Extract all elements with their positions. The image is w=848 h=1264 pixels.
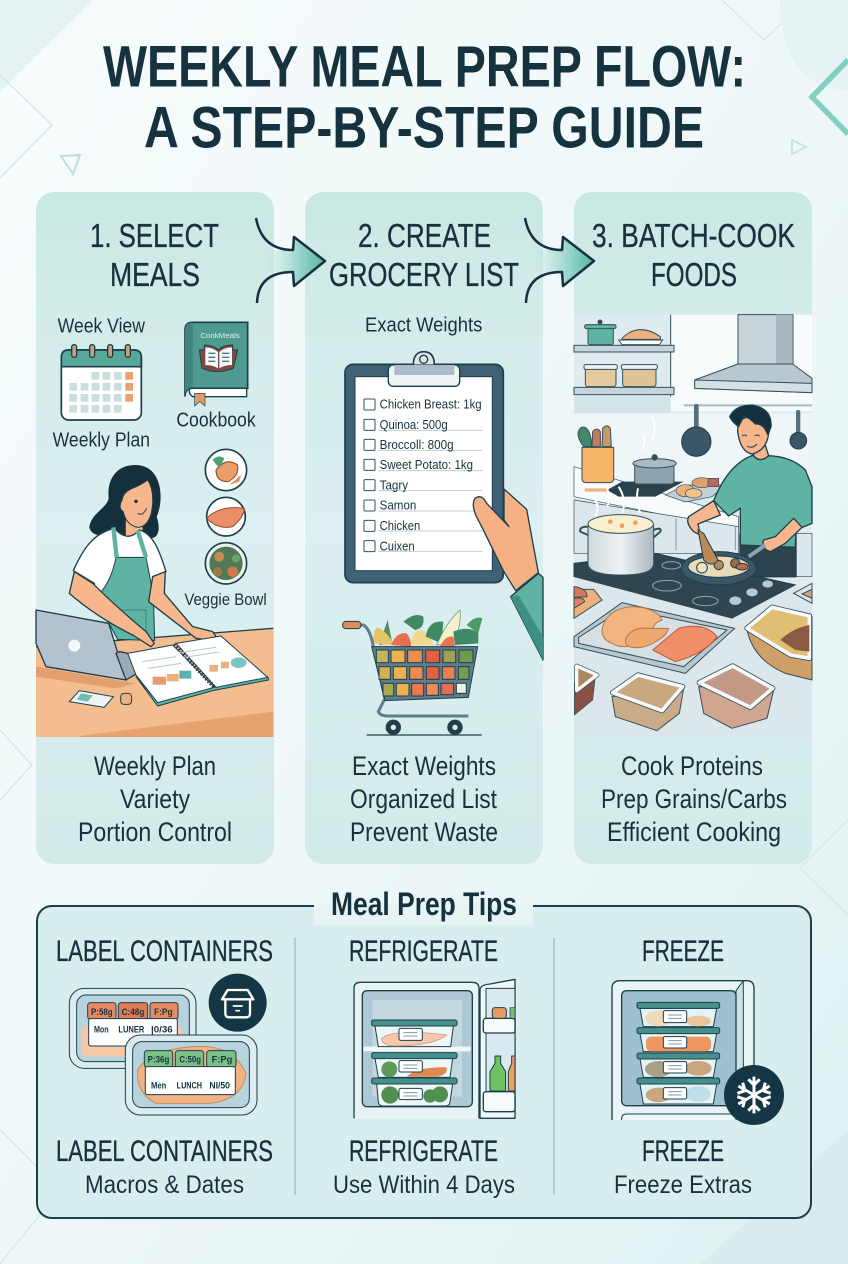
tip: label containers: Macros & Dates [85, 1171, 244, 1199]
tip: freeze: FREEZE [642, 1135, 724, 1168]
illustration: labelled containers: LUNCH [177, 1080, 202, 1090]
checklist: Cuixen [380, 539, 415, 553]
illustration: labelled containers: F:Pg [154, 1007, 173, 1017]
panel: batch-cook foods [574, 192, 812, 864]
panel: grocery list [305, 192, 543, 864]
cutting board [574, 583, 812, 618]
tip: refrigerate [333, 935, 515, 1199]
panel: select meals [36, 192, 274, 864]
text: select meals benefits [78, 751, 232, 847]
icon: cookbook: CookMeals [200, 331, 240, 340]
text: batch-cook benefits [601, 751, 787, 847]
heading: select meals [90, 217, 219, 293]
checklist [364, 398, 482, 553]
arrow: step 2 to step 3 [525, 218, 594, 303]
text: grocery benefits: Organized List [350, 784, 497, 814]
illustration: freezer [612, 981, 784, 1125]
label: veggie bowl: Veggie Bowl [184, 590, 267, 609]
checklist: Samon [380, 499, 416, 513]
text: grocery benefits: Prevent Waste [350, 817, 498, 847]
panel: meal prep tips [37, 886, 811, 1218]
heading: create grocery list: 2. CREATE [358, 217, 491, 254]
checklist: Chicken Breast: 1kg [380, 398, 482, 412]
label: week view: Week View [58, 315, 145, 337]
tip: refrigerate: REFRIGERATE [349, 935, 498, 968]
heading: batch-cook foods: FOODS [651, 256, 737, 293]
container: ground meat [699, 666, 774, 728]
tip: freeze: Freeze Extras [614, 1171, 752, 1199]
illustration: labelled containers: P:36g [148, 1055, 170, 1065]
illustration: labelled containers: NI/50 [209, 1080, 230, 1090]
illustration: labelled containers: P:58g [91, 1007, 113, 1017]
tip: refrigerate: REFRIGERATE [349, 1135, 498, 1168]
icon: container badge [209, 974, 267, 1032]
heading: meal prep tips: Meal Prep Tips [331, 886, 517, 922]
illustration: labelled containers: LUNER [118, 1025, 145, 1035]
text: batch-cook benefits: Cook Proteins [621, 751, 763, 781]
text: select meals benefits: Variety [120, 784, 190, 814]
tip: label containers: LABEL CONTAINERS [56, 935, 273, 968]
tip: label containers: LABEL CONTAINERS [56, 1135, 273, 1168]
frying pan [681, 530, 765, 585]
heading: select meals: 1. SELECT [90, 217, 219, 254]
label: weekly plan: Weekly Plan [53, 429, 150, 452]
text: grocery benefits [350, 751, 498, 847]
illustration: planning scene [36, 315, 273, 737]
tip: freeze: FREEZE [642, 935, 724, 968]
text: select meals benefits: Weekly Plan [94, 751, 216, 781]
stove top [574, 553, 795, 618]
illustration: labelled containers: C:48g [122, 1007, 145, 1017]
label: cookbook: Cookbook [176, 410, 257, 432]
title: A STEP-BY-STEP GUIDE [144, 96, 704, 160]
counter back [574, 467, 812, 577]
shelves [574, 315, 674, 397]
illustration: labelled containers: |0/36 [151, 1025, 173, 1035]
text: batch-cook benefits: Efficient Cooking [607, 817, 781, 847]
illustration: woman [69, 465, 219, 647]
checklist: Quinoa: 500g [380, 418, 448, 432]
icon: cookbook [185, 322, 248, 406]
checklist: Broccoll: 800g [380, 438, 454, 452]
icon: calendar [61, 345, 141, 420]
illustration: labelled containers: C:50g [179, 1055, 201, 1065]
hanging pans [682, 404, 812, 456]
arrow: step 1 to step 2 [256, 218, 325, 303]
icon: clipboard [345, 352, 503, 583]
illustration: labelled containers [69, 974, 267, 1115]
illustration: shopping cart with vegetables [343, 610, 482, 735]
cook [688, 405, 812, 577]
small pot [633, 455, 676, 484]
stock pot [580, 417, 661, 575]
heading: batch-cook foods: 3. BATCH-COOK [592, 217, 795, 254]
kitchen wall [574, 315, 812, 737]
tip: refrigerate: Use Within 4 Days [333, 1171, 515, 1199]
title [103, 34, 746, 160]
checklist: Chicken [380, 519, 420, 533]
icon: phone and cup [69, 691, 132, 707]
heading: create grocery list [329, 217, 519, 293]
illustration: open fridge [354, 979, 515, 1118]
heading: create grocery list: GROCERY LIST [329, 256, 519, 293]
illustration: labelled containers: Mon [94, 1025, 109, 1035]
heading: batch-cook foods [592, 217, 795, 293]
illustration: grocery list scene [343, 314, 543, 735]
illustration: laptop [36, 610, 161, 680]
illustration: kitchen scene [574, 315, 812, 737]
icon: snowflake badge [724, 1065, 784, 1125]
container: partial [574, 666, 597, 715]
illustration: meal plan notebook [128, 636, 269, 706]
tip: freeze [612, 935, 784, 1199]
checklist: Sweet Potato: 1kg [380, 458, 473, 472]
food tray [665, 478, 725, 502]
tip: label containers [56, 935, 273, 1199]
range hood [695, 315, 812, 393]
illustration: labelled containers: F:Pg [212, 1055, 233, 1065]
container: quinoa [612, 675, 684, 731]
sheet tray with chicken and salmon [574, 603, 735, 673]
utensil jar [578, 426, 614, 483]
checklist: Tagry [380, 478, 409, 492]
heading: select meals: MEALS [110, 256, 200, 293]
counter front [574, 577, 812, 737]
text: batch-cook benefits: Prep Grains/Carbs [601, 784, 787, 814]
label: exact weights: Exact Weights [365, 314, 482, 336]
icon: meal plates [205, 449, 247, 584]
illustration: table [36, 628, 273, 737]
text: grocery benefits: Exact Weights [352, 751, 496, 781]
illustration: hand holding clipboard [473, 489, 543, 660]
illustration: labelled containers: Men [151, 1080, 167, 1090]
container: grains [747, 607, 812, 680]
text: select meals benefits: Portion Control [78, 817, 232, 847]
